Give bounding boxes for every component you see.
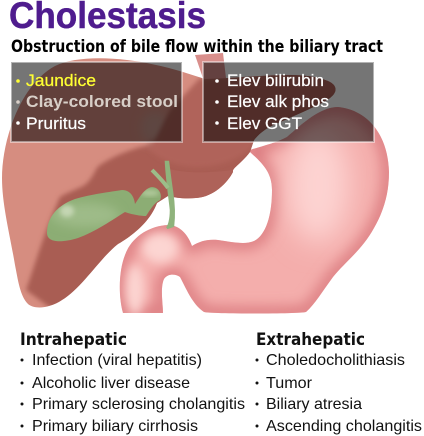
list: extrahepatic causes <box>256 352 422 435</box>
panel: intrahepatic causes <box>20 330 245 435</box>
list: extrahepatic causes: Biliary atresia <box>266 396 362 413</box>
list: intrahepatic causes: Primary biliary cirrhosis <box>32 418 198 435</box>
illustration: liver, gallbladder and stomach <box>0 50 400 320</box>
list: intrahepatic causes: Alcoholic liver disease <box>32 375 190 392</box>
liver left lobe <box>152 75 336 154</box>
panel: lab findings <box>203 62 374 142</box>
clay-colored stool: Clay-colored stool <box>26 92 178 111</box>
panel: symptoms <box>11 62 182 142</box>
elev alk phos: Elev alk phos <box>227 92 329 111</box>
gallbladder <box>47 187 161 242</box>
heading: extrahepatic: Extrahepatic <box>256 330 365 350</box>
bile ducts <box>166 162 174 228</box>
esophagus <box>195 53 226 84</box>
stomach <box>120 107 389 314</box>
list: extrahepatic causes: Choledocholithiasis <box>266 352 405 369</box>
liver <box>0 50 345 315</box>
list: extrahepatic causes: Ascending cholangitis <box>266 418 422 435</box>
elev ggt: Elev GGT <box>227 114 302 133</box>
list: intrahepatic causes: Primary sclerosing cholangitis <box>32 396 245 413</box>
list: extrahepatic causes: Tumor <box>266 375 313 392</box>
list: intrahepatic causes <box>20 352 245 435</box>
heading: intrahepatic: Intrahepatic <box>20 330 127 350</box>
liver shaded underside <box>26 70 345 315</box>
elev bilirubin: Elev bilirubin <box>227 71 324 90</box>
panel: extrahepatic causes <box>256 330 422 435</box>
caudate lobe <box>197 192 213 198</box>
list: intrahepatic causes: Infection (viral hepatitis) <box>32 352 202 369</box>
jaundice: Jaundice <box>26 71 96 90</box>
pruritus: Pruritus <box>26 114 86 133</box>
